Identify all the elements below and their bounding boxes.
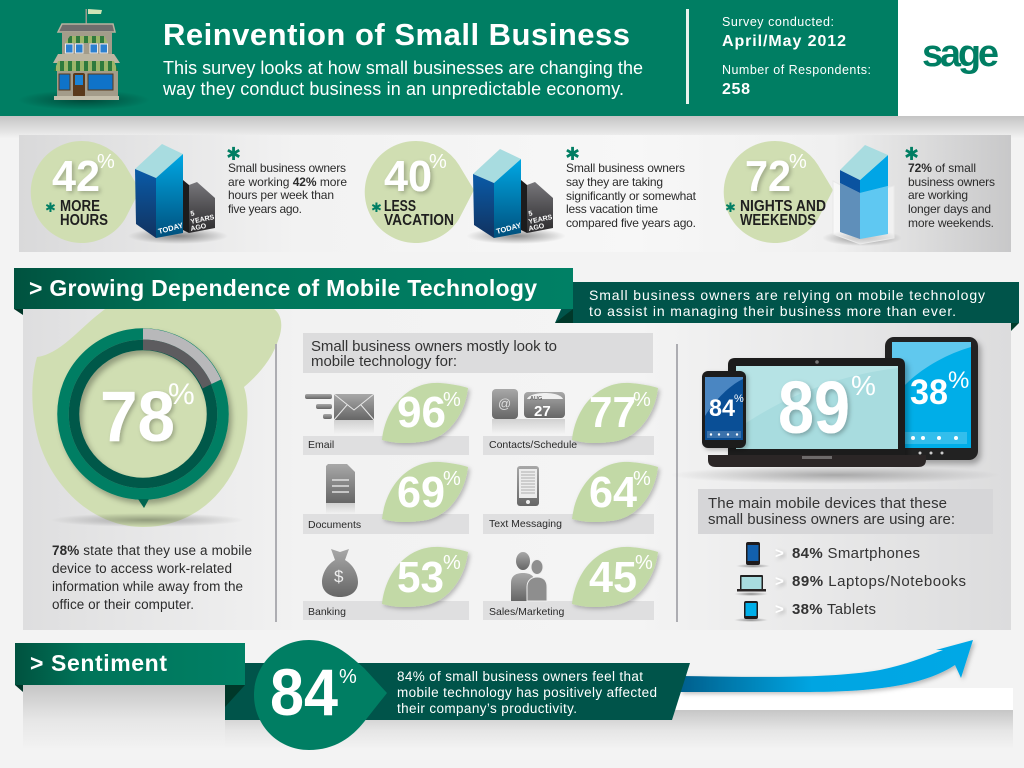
stat: 42% more hours: HOURS — [60, 212, 108, 229]
item: contacts/schedule 77%: @ — [498, 396, 511, 411]
list: device percentages: > — [775, 545, 784, 562]
stat: 42% more hours: Small business owners — [228, 161, 346, 175]
item: documents 69%: % — [443, 468, 461, 490]
stat: 40% less vacation: AGO — [528, 223, 546, 233]
chart: 78% ring: 78 — [100, 378, 175, 457]
list: device percentages: 84% Smartphones — [792, 545, 920, 562]
logo: sage — [898, 0, 1024, 116]
item: contacts/schedule 77%: 77 — [589, 388, 636, 437]
list: device percentages: 89% Laptops/Notebooks — [792, 573, 966, 590]
list: device percentages: 38% Tablets — [792, 601, 876, 618]
item: banking 53% — [303, 547, 469, 620]
item: text messaging 64% — [483, 462, 658, 534]
stat: 72% nights and weekends: ✱ — [725, 201, 736, 216]
text box: devices heading: small business owners are using are: — [708, 511, 955, 528]
subtitle — [162, 58, 643, 99]
text box: uses heading: Small business owners mostly look to — [311, 338, 557, 355]
survey details — [722, 15, 871, 98]
text: 78% description: 78% state that they use a mobile — [52, 543, 252, 558]
icon: laptop 89%: 89 — [778, 366, 850, 449]
icon: storefront — [18, 9, 150, 110]
subtitle: This survey looks at how small businesses are changing the — [163, 58, 643, 78]
item: email 96%: 96 — [397, 388, 446, 437]
ribbon: sentiment statement — [225, 663, 690, 720]
stat: 42% more hours: ✱ — [45, 201, 56, 216]
ribbon: mobile technology intro — [555, 282, 1019, 331]
heading: growing dependence — [14, 268, 573, 315]
ribbon: mobile technology intro: Small business owners are relying on mobile technology — [589, 287, 985, 303]
text box: devices heading — [698, 489, 993, 534]
text box: uses heading: mobile technology for: — [311, 353, 457, 370]
stat: 42% more hours: AGO — [190, 223, 208, 233]
stat: 40% less vacation: significantly or somewhat — [566, 189, 697, 203]
stat: 40% less vacation: say they are taking — [566, 175, 663, 189]
item: banking 53%: 53 — [397, 553, 444, 602]
header banner — [0, 0, 898, 116]
panel: sentiment — [15, 640, 1013, 750]
stat: 40% less vacation: 5 — [528, 210, 533, 218]
item: text messaging 64%: 64 — [589, 468, 638, 517]
heading: growing dependence: > Growing Dependence of Mobile Technology — [29, 275, 537, 301]
list: device percentages: > — [775, 601, 784, 618]
stat: 72% nights and weekends: more weekends. — [908, 216, 994, 230]
stat: 40% less vacation: VACATION — [384, 212, 454, 229]
icon: phone 84%: % — [734, 393, 744, 405]
stat: 42% more hours: 5 — [190, 210, 195, 218]
stat: 42% more hours: five years ago. — [228, 202, 302, 216]
item: email 96%: Email — [308, 439, 334, 451]
item: contacts/schedule 77%: Contacts/Schedule — [489, 439, 577, 451]
stat: 72% nights and weekends: NIGHTS AND — [740, 198, 826, 215]
item: documents 69%: 69 — [397, 468, 445, 517]
title: Reinvention of Small Business — [163, 17, 630, 52]
icon: phone 84%: 84 — [709, 395, 736, 422]
stat: 84% badge: % — [339, 666, 357, 688]
item: contacts/schedule 77% — [483, 383, 658, 455]
stat: 42% more hours — [31, 141, 347, 244]
stat: 40% less vacation: ✱ — [371, 201, 382, 216]
text: 78% description: office or their computer. — [52, 597, 194, 612]
stat: 72% nights and weekends: 72 — [745, 152, 791, 201]
item: sales/marketing 45%: 45 — [589, 553, 637, 602]
item: sales/marketing 45% — [483, 547, 658, 620]
panel: growing dependence of mobile technology — [14, 268, 1019, 630]
icon: phone 84% — [702, 371, 746, 448]
panel: key statistics — [19, 135, 1011, 252]
item: sales/marketing 45%: % — [635, 552, 653, 574]
heading: sentiment: > Sentiment — [30, 650, 167, 676]
text: 78% description: information while away from the — [52, 579, 243, 594]
item: banking 53%: Banking — [308, 606, 346, 618]
list: device percentages: > — [775, 573, 784, 590]
stat: 40% less vacation — [365, 141, 697, 244]
survey details: 258 — [722, 81, 750, 98]
text box: devices heading: The main mobile devices that these — [708, 495, 947, 512]
stat: 72% nights and weekends: longer days and — [908, 202, 991, 216]
chart: 78% ring: % — [168, 378, 195, 411]
stat: 40% less vacation: YEARS — [528, 214, 553, 226]
stat: 40% less vacation: % — [429, 151, 447, 173]
stat: 42% more hours: MORE — [60, 198, 100, 215]
icon: laptop 89%: % — [851, 370, 876, 401]
survey details: Number of Respondents: — [722, 63, 871, 77]
stat: 42% more hours: 42 — [52, 152, 100, 201]
stat: 42% more hours: YEARS — [190, 214, 215, 226]
stat: 72% nights and weekends: ✱ — [904, 144, 919, 165]
item: email 96% — [303, 383, 469, 455]
heading: sentiment — [15, 643, 245, 692]
item: contacts/schedule 77%: % — [633, 389, 651, 411]
arrow: upward trend — [680, 640, 973, 692]
stat: 42% more hours: TODAY — [157, 221, 184, 236]
chart: 78% ring — [32, 309, 281, 527]
icon: laptop 89% — [708, 358, 926, 467]
stat: 72% nights and weekends: 72% of small — [908, 161, 976, 175]
illustration: mobile devices — [670, 337, 1000, 484]
stat: 72% nights and weekends — [724, 141, 995, 246]
stat: 40% less vacation: 40 — [384, 152, 432, 201]
stat: 72% nights and weekends: WEEKENDS — [740, 212, 816, 229]
stat: 84% badge: 84 — [270, 655, 338, 729]
stat: 40% less vacation: compared five years ago. — [566, 216, 696, 230]
stat: 42% more hours: % — [97, 151, 115, 173]
icon: tablet 38%: 38 — [910, 373, 948, 412]
icon: tablet 38% — [885, 337, 978, 460]
item: sales/marketing 45%: Sales/Marketing — [489, 606, 564, 618]
item: documents 69%: Documents — [308, 519, 361, 531]
icon: tablet 38%: % — [948, 367, 969, 394]
survey details: Survey conducted: — [722, 15, 834, 29]
item: banking 53%: % — [443, 552, 461, 574]
list: device percentages — [734, 542, 966, 622]
subtitle: way they conduct business in an unpredictable economy. — [162, 79, 624, 99]
ribbon: sentiment statement: mobile technology has positively affected — [397, 685, 657, 700]
item: email 96%: % — [443, 389, 461, 411]
ribbon: sentiment statement: their company’s productivity. — [397, 701, 577, 716]
item: text messaging 64%: % — [633, 468, 651, 490]
stat: 72% nights and weekends: % — [789, 151, 807, 173]
stat: 40% less vacation: TODAY — [495, 221, 522, 236]
text: 78% description: device to access work-related — [52, 561, 232, 576]
text: 78% description — [52, 543, 252, 612]
stat: 40% less vacation: LESS — [384, 198, 416, 215]
stat: 40% less vacation: Small business owners — [566, 161, 685, 175]
text box: uses heading — [303, 333, 653, 373]
stat: 84% badge — [254, 640, 387, 750]
stat: 42% more hours: hours per week than — [228, 188, 334, 202]
item: documents 69% — [303, 462, 469, 534]
item: contacts/schedule 77%: AUG — [530, 396, 542, 402]
ribbon: sentiment statement: 84% of small business owners feel that — [397, 669, 643, 684]
item: banking 53%: $ — [334, 567, 344, 586]
ribbon: mobile technology intro: to assist in managing their business more than ever. — [589, 303, 956, 319]
item: contacts/schedule 77%: 27 — [534, 403, 551, 420]
stat: 42% more hours: are working 42% more — [228, 175, 347, 189]
stat: 72% nights and weekends: business owners — [908, 175, 995, 189]
survey details: April/May 2012 — [722, 33, 846, 50]
item: text messaging 64%: Text Messaging — [489, 518, 562, 530]
stat: 72% nights and weekends: are working — [908, 188, 968, 202]
stat: 40% less vacation: less vacation time — [566, 202, 658, 216]
stat: 42% more hours: ✱ — [226, 144, 241, 165]
stat: 40% less vacation: ✱ — [565, 144, 580, 165]
logo: sage: sage — [922, 33, 999, 75]
